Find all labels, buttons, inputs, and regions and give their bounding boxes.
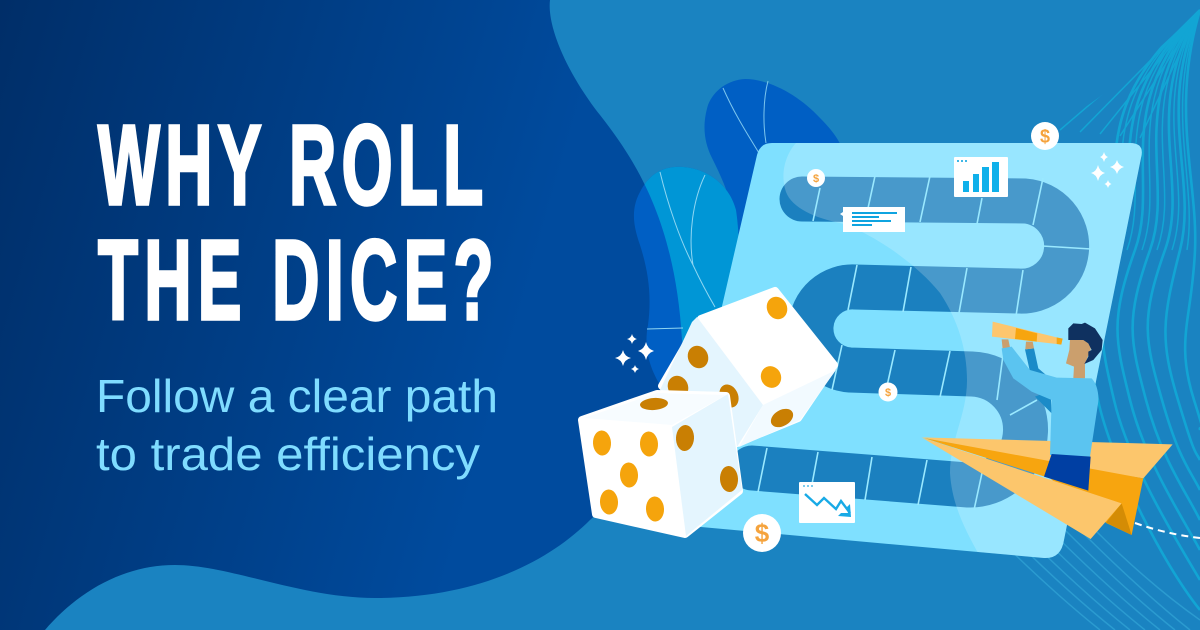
leaf: back: [705, 79, 842, 330]
coin: track start: $: [813, 173, 819, 185]
leaf: front: [634, 167, 739, 388]
light overlay: [783, 143, 1145, 560]
shorts: [1044, 454, 1091, 491]
subtitle: [96, 370, 498, 480]
subtitle: to trade efficiency: [96, 428, 480, 480]
subtitle: Follow a clear path: [96, 370, 498, 422]
lower die: [582, 393, 742, 536]
title: [98, 101, 500, 343]
coin: top right: $: [1040, 126, 1050, 146]
paper plane: upper wing: [922, 437, 1173, 535]
upper die: [660, 291, 836, 447]
card: falling chart: [799, 482, 855, 523]
coin: bottom: [743, 514, 781, 552]
sweater: [1002, 347, 1098, 457]
card: bar chart: [954, 157, 1008, 197]
head: [1066, 339, 1091, 378]
coin: middle: [878, 382, 898, 402]
game board panel: [675, 143, 1145, 560]
dashed flight path: [1135, 523, 1200, 538]
coin: top right: [1031, 122, 1059, 150]
title: WHY ROLL: [98, 101, 489, 228]
paper plane: lower wing: [922, 437, 1132, 539]
card: message: [840, 207, 905, 232]
board path track: [752, 199, 1067, 485]
title: THE DICE?: [98, 216, 500, 343]
coin: bottom: $: [755, 518, 770, 548]
coin: track start: [807, 169, 825, 187]
man with telescope: [992, 322, 1103, 491]
sparkles: left: [615, 334, 654, 373]
wave line pattern: [1015, 9, 1200, 630]
telescope: [992, 322, 1057, 344]
sparkles: top right: [1091, 152, 1124, 188]
coin: middle: $: [885, 387, 891, 399]
hair: [1068, 323, 1103, 364]
track cell dividers: [758, 176, 1091, 510]
